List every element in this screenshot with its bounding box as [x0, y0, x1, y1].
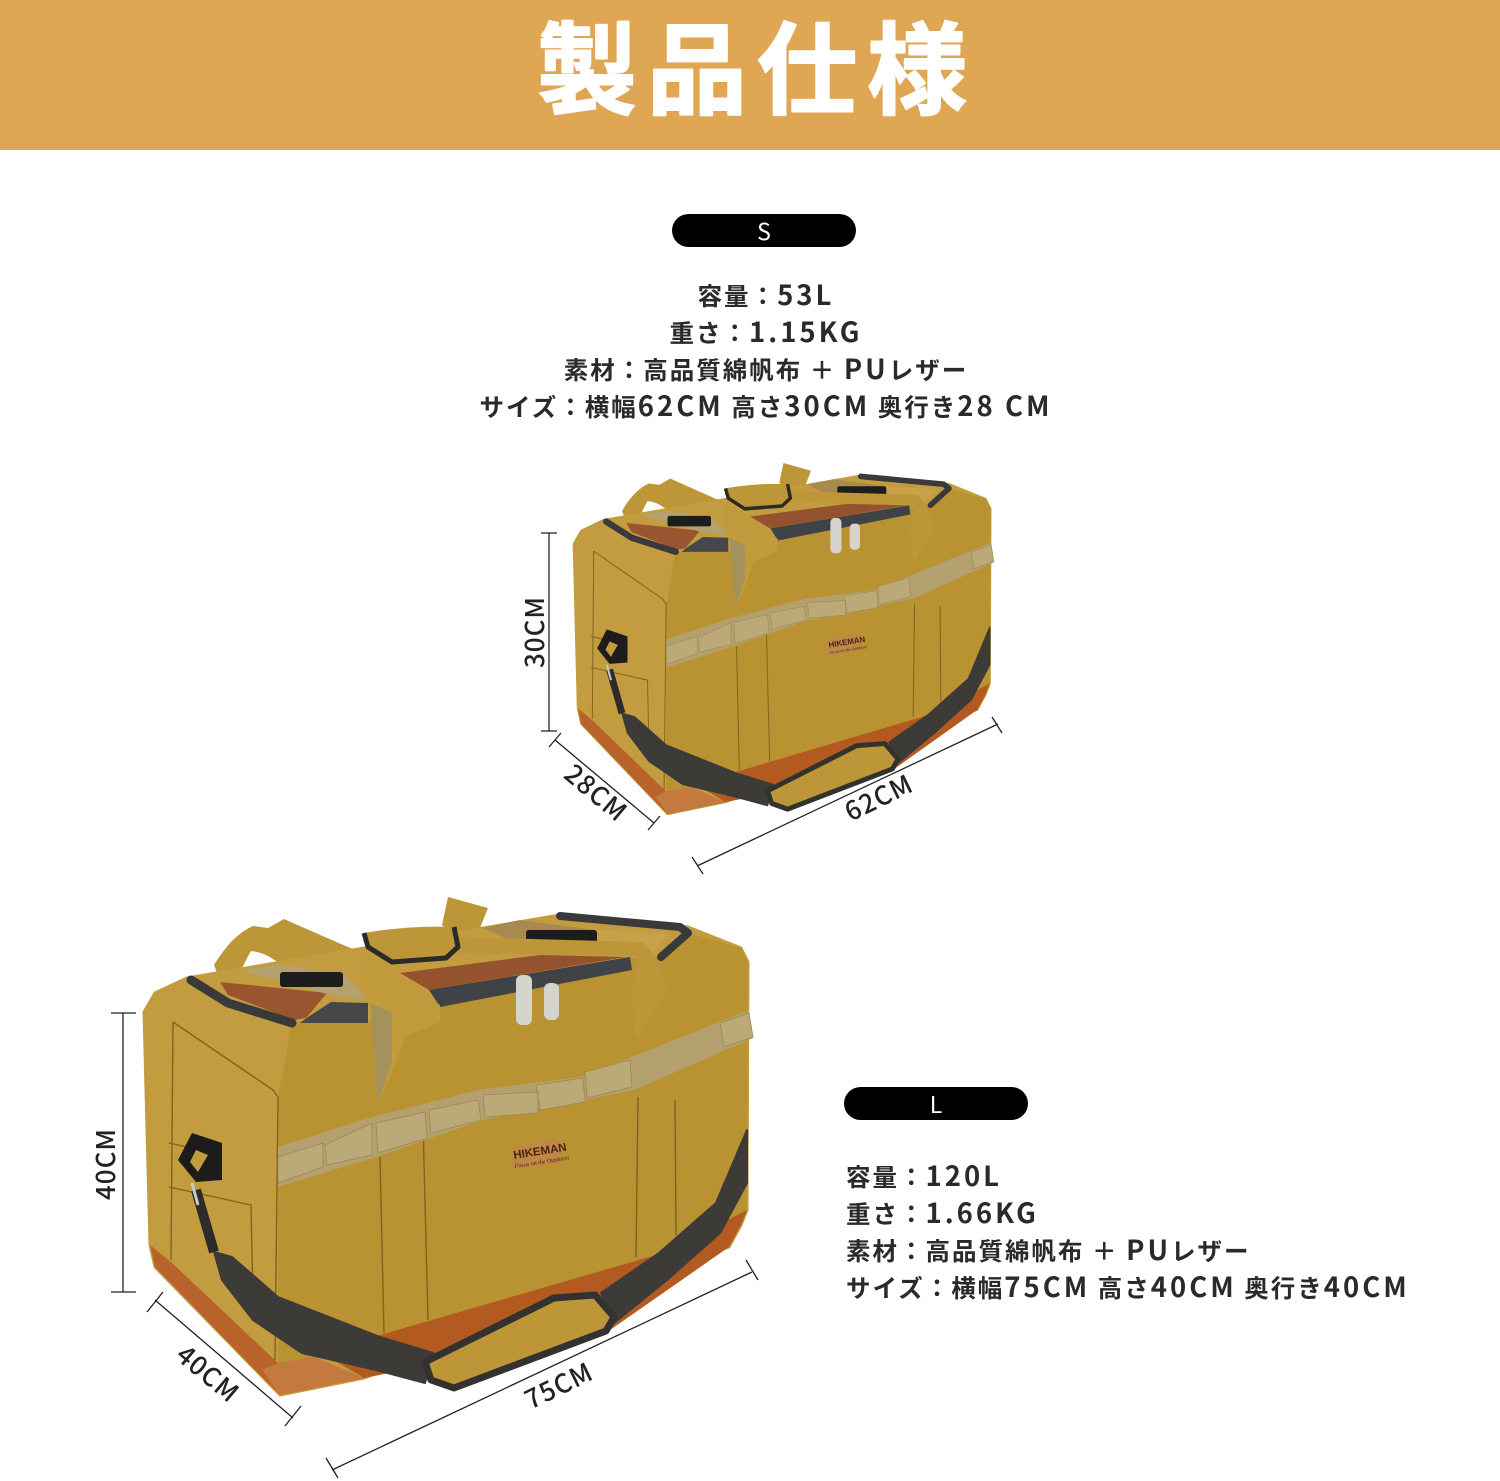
size S badge: S	[757, 213, 771, 247]
S depth dimension	[549, 733, 660, 830]
large duffel bag illustration: Focus on the Outdoors	[513, 1155, 570, 1170]
size S badge	[672, 214, 856, 247]
S height dimension: 30CM	[515, 596, 552, 668]
size S specifications: 容量：53L	[698, 273, 834, 313]
size L badge: L	[930, 1086, 942, 1120]
L height dimension: 40CM	[86, 1128, 123, 1200]
S height dimension	[515, 533, 557, 731]
size L specifications: サイズ：横幅75CM 高さ40CM 奥行き40CM	[846, 1265, 1410, 1305]
size L specifications: 容量：120L	[846, 1154, 1002, 1194]
size L specifications: 素材：高品質綿帆布 ＋ PUレザー	[846, 1228, 1251, 1268]
L width dimension	[326, 1260, 758, 1478]
small duffel bag illustration: Focus on the Outdoors	[828, 644, 868, 655]
S depth dimension: 28CM	[557, 755, 636, 829]
large duffel bag illustration	[144, 897, 753, 1395]
size S specifications	[480, 273, 1052, 424]
S width dimension	[692, 717, 1002, 874]
header band	[0, 0, 1500, 150]
size L badge	[844, 1087, 1028, 1120]
large duffel bag illustration: HIKEMAN	[513, 1142, 567, 1162]
L depth dimension	[147, 1292, 301, 1426]
L width dimension: 75CM	[518, 1352, 599, 1417]
size S specifications: 素材：高品質綿帆布 ＋ PUレザー	[564, 347, 968, 387]
small duffel bag illustration: HIKEMAN	[828, 635, 866, 650]
S width dimension: 62CM	[838, 764, 919, 829]
size L specifications	[846, 1154, 1410, 1305]
size S specifications: 重さ：1.15KG	[670, 310, 862, 350]
size L specifications: 重さ：1.66KG	[846, 1191, 1039, 1231]
L depth dimension: 40CM	[169, 1336, 248, 1410]
L height dimension	[86, 1013, 136, 1292]
small duffel bag illustration	[574, 463, 994, 814]
size S specifications: サイズ：横幅62CM 高さ30CM 奥行き28 CM	[480, 384, 1052, 424]
